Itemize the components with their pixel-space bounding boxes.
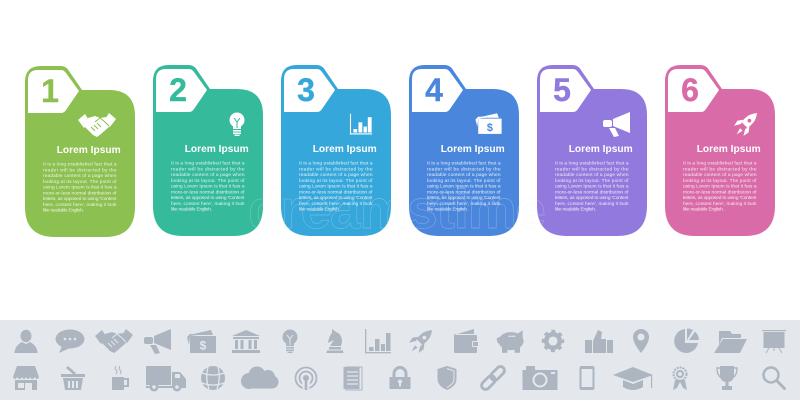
heading: Lorem Ipsum [185, 144, 249, 155]
body text: like readable English. [43, 208, 84, 214]
body text: looking at its layout. The point of [683, 178, 757, 184]
card shape [281, 65, 391, 236]
body text: reader will be distracted by the [555, 166, 629, 172]
body text: here, content here', making it look [683, 201, 757, 207]
number 3: 3 [297, 72, 315, 108]
icon: chess knight [326, 329, 344, 353]
body text: more-or-less normal distribution of [171, 189, 245, 195]
icon: megaphone [144, 329, 171, 354]
body text: letters, as opposed to using 'Content [299, 195, 373, 201]
body text: more-or-less normal distribution of [683, 189, 757, 195]
body text: readable content of a page when [427, 172, 501, 178]
body text: using Lorem Ipsum is that it has a [683, 184, 757, 190]
body text: letters, as opposed to using 'Content [171, 195, 245, 201]
number tab [28, 70, 79, 113]
icon: basket [61, 366, 85, 390]
body text: like readable English. [171, 207, 212, 213]
body text: It is a long established fact that a [683, 161, 757, 167]
icon: presentation board [762, 330, 786, 353]
body text: reader will be distracted by the [171, 166, 245, 172]
icon: signal [296, 368, 316, 391]
heading: Lorem Ipsum [569, 144, 633, 155]
icon: rocket [409, 330, 432, 353]
body text: readable content of a page when [43, 173, 117, 179]
number tab [668, 69, 719, 112]
body text [683, 161, 757, 213]
body text [299, 161, 373, 213]
icon: truck [146, 366, 186, 392]
body text: like readable English. [555, 207, 596, 213]
panel: step 3 [281, 65, 391, 236]
body text: here, content here', making it look [555, 201, 629, 207]
body text: It is a long established fact that a [171, 161, 245, 167]
icon: bar chart [365, 329, 391, 353]
body text [43, 162, 117, 214]
heading: Lorem Ipsum [313, 144, 377, 155]
body text: It is a long established fact that a [555, 161, 629, 167]
body text: reader will be distracted by the [683, 166, 757, 172]
body text: more-or-less normal distribution of [427, 189, 501, 195]
body text: more-or-less normal distribution of [43, 190, 117, 196]
body text: looking at its layout. The point of [171, 178, 245, 184]
body text: letters, as opposed to using 'Content [427, 195, 501, 201]
body text: reader will be distracted by the [43, 167, 117, 173]
icon: rocket [734, 113, 757, 136]
body text: like readable English. [683, 207, 724, 213]
body text: using Lorem Ipsum is that it has a [43, 185, 117, 191]
icon: wallet [454, 329, 479, 353]
body text: using Lorem Ipsum is that it has a [555, 184, 629, 190]
body text: looking at its layout. The point of [43, 179, 117, 185]
icon: camera [522, 366, 558, 390]
body text: letters, as opposed to using 'Content [43, 196, 117, 202]
body text: using Lorem Ipsum is that it has a [171, 184, 245, 190]
body text: using Lorem Ipsum is that it has a [427, 184, 501, 190]
body text: reader will be distracted by the [299, 166, 373, 172]
icon: person [14, 330, 38, 353]
heading: Lorem Ipsum [697, 144, 761, 155]
icon: map pin [633, 329, 649, 353]
body text: here, content here', making it look [171, 201, 245, 207]
icon: light bulb [282, 330, 298, 353]
body text: looking at its layout. The point of [427, 178, 501, 184]
body text: more-or-less normal distribution of [555, 189, 629, 195]
body text: It is a long established fact that a [43, 162, 117, 168]
panel: icon strip [0, 320, 800, 400]
number 6: 6 [681, 72, 699, 108]
body text: readable content of a page when [299, 172, 373, 178]
icon: coffee cup [112, 366, 128, 390]
body text: It is a long established fact that a [299, 161, 373, 167]
icon: bar chart [350, 114, 372, 134]
icon: magnifying glass [764, 368, 784, 388]
body text [427, 161, 501, 213]
watermark: dreamstime [248, 178, 546, 240]
icon: trophy [717, 366, 737, 390]
number 4: 4 [425, 72, 443, 108]
number tab [412, 69, 463, 112]
icon: light bulb [230, 112, 244, 136]
body text: here, content here', making it look [427, 201, 501, 207]
body text: readable content of a page when [683, 172, 757, 178]
body text [171, 161, 245, 213]
panel: step 2 [153, 65, 263, 236]
icon: bank [232, 330, 260, 353]
card shape [665, 65, 775, 236]
body text: readable content of a page when [555, 172, 629, 178]
number 5: 5 [553, 72, 571, 108]
number tab [156, 69, 207, 112]
body text: readable content of a page when [171, 172, 245, 178]
icon: chat bubble [56, 330, 84, 353]
body text: letters, as opposed to using 'Content [683, 195, 757, 201]
icon: money [187, 330, 216, 353]
icon: shield [438, 366, 456, 390]
icon: gear [544, 332, 562, 350]
icon: piggy bank [497, 330, 524, 353]
icon: document [344, 367, 362, 390]
icon: shop [13, 366, 39, 390]
icon: handshake [95, 329, 133, 353]
body text: here, content here', making it look [43, 202, 117, 208]
number tab [540, 69, 591, 112]
panel: step 1 [25, 66, 135, 237]
body text: like readable English. [427, 207, 468, 213]
card shape [409, 65, 519, 236]
body text: It is a long established fact that a [427, 161, 501, 167]
icon: folder [714, 331, 747, 353]
body text [555, 161, 629, 213]
panel: step 5 [537, 65, 647, 236]
panel: step 4 [409, 65, 519, 236]
number 1: 1 [41, 73, 59, 109]
card shape [537, 65, 647, 236]
icon: pie chart [674, 328, 699, 353]
card shape [153, 65, 263, 236]
panel: step 6 [665, 65, 775, 236]
icon: handshake [78, 113, 116, 137]
body text: looking at its layout. The point of [555, 178, 629, 184]
icon: graduation cap [613, 367, 653, 390]
body text: using Lorem Ipsum is that it has a [299, 184, 373, 190]
body text: like readable English. [299, 207, 340, 213]
strip background [0, 320, 800, 400]
icon: award ribbon [673, 368, 687, 390]
icon: globe [201, 366, 225, 390]
body text: more-or-less normal distribution of [299, 189, 373, 195]
heading: Lorem Ipsum [57, 145, 121, 156]
heading: Lorem Ipsum [441, 144, 505, 155]
number 2: 2 [169, 72, 187, 108]
icon: padlock [390, 368, 410, 389]
icon: thumbs up [585, 330, 613, 353]
icon: smartphone [580, 366, 594, 390]
body text: here, content here', making it look [299, 201, 373, 207]
number tab [284, 69, 335, 112]
icon: money [476, 113, 502, 134]
body text: letters, as opposed to using 'Content [555, 195, 629, 201]
body text: looking at its layout. The point of [299, 178, 373, 184]
icon: cloud [241, 366, 278, 389]
card shape [25, 66, 135, 237]
icon: megaphone [603, 112, 630, 137]
body text: reader will be distracted by the [427, 166, 501, 172]
icon: chain link [480, 365, 506, 391]
